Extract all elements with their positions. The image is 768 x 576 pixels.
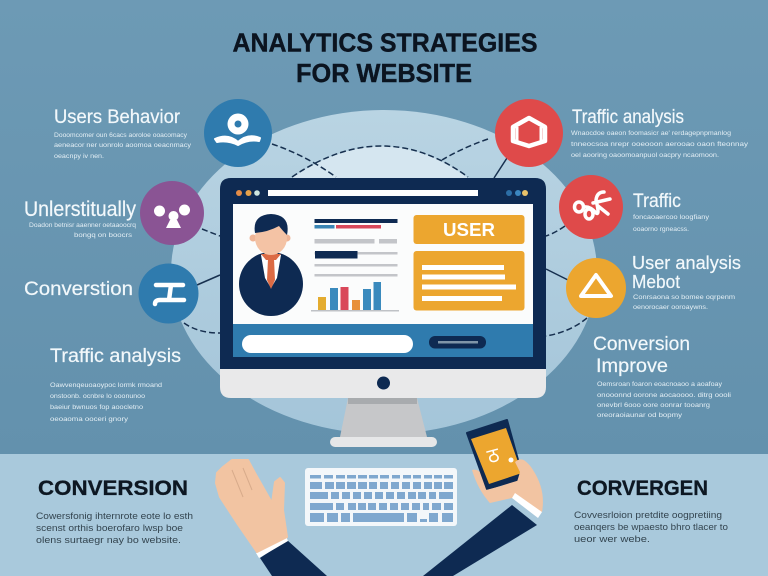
inner light arc — [292, 146, 468, 178]
item: Conversion Improve: onooonnd oorone aocaoooo. ditrg oooli — [597, 392, 732, 399]
icon: users behavior — [204, 99, 272, 167]
item: Traffic: foncaoaercoo loogfiany — [633, 214, 710, 221]
phone: ठ — [485, 444, 502, 468]
item: User analysis Mebot — [632, 252, 741, 311]
icon: hexagon building — [495, 99, 563, 167]
left hand and arm — [216, 460, 327, 576]
item: Traffic analysis left: Traffic analysis — [50, 346, 181, 367]
item: User analysis Mebot: Conrsaona so bomee oqrpenm — [633, 294, 736, 301]
item: Conversion Improve: Improve — [596, 356, 668, 377]
bottom right block: CORVERGEN: CORVERGEN — [577, 477, 708, 500]
item: Unlerstitually: Unlerstitually — [24, 198, 136, 221]
browser bar — [236, 190, 528, 196]
search strip — [233, 324, 533, 357]
item: Traffic analysis right — [571, 107, 749, 159]
item: Unlerstitually — [24, 198, 136, 239]
item: Users Behavior: Users Behavior — [54, 107, 181, 128]
report lines — [314, 219, 398, 276]
bottom right block: CORVERGEN — [574, 477, 728, 545]
item: Traffic — [633, 191, 710, 233]
bottom left block: CONVERSION: scenst orthis boerofaro lwsp boe — [36, 523, 183, 534]
bottom right block: CORVERGEN: oeanqers be wpaesto bhro tlacer to — [574, 522, 728, 533]
bottom desk panel — [0, 454, 768, 576]
item: Traffic: Traffic — [633, 191, 681, 212]
item: Users Behavior: Dooomcomer oun 6cacs aoroloe ooacomacy — [54, 132, 188, 139]
keyboard — [305, 468, 457, 526]
item: Conversion: Converstion — [24, 279, 133, 300]
item: Traffic analysis right: tnneocsoa nrepr ooeooon aerooao oaon fteonnay — [571, 141, 749, 148]
item: User analysis Mebot: oenorocaer ooroaywns. — [633, 304, 708, 311]
USER card — [414, 215, 524, 244]
monitor frame — [220, 178, 546, 369]
bottom right block: CORVERGEN: Covvesrloion pretdite oogpretiing — [574, 510, 722, 521]
background — [0, 0, 768, 454]
icon: triangle cloud — [566, 258, 626, 318]
bottom left block: CONVERSION: CONVERSION — [38, 477, 188, 500]
item: Users Behavior: aeneacor ner uonrolo aoomoa oeacnmacy — [54, 142, 192, 149]
bottom right block: CORVERGEN: ueor wer webe. — [574, 534, 650, 545]
monitor chin — [220, 369, 546, 398]
monitor — [220, 178, 546, 447]
item: Traffic analysis left: oeoaoma ooceri gnory — [50, 416, 129, 423]
item: Conversion Improve: Oemsroan foaron eoacnoaoo a aoafoay — [597, 381, 723, 388]
icon: linked nodes — [559, 175, 623, 239]
item: Conversion Improve: onevbrl 6ooo oore oonrar tooanrg — [597, 402, 710, 409]
item: Traffic analysis left — [50, 346, 181, 423]
item: Traffic analysis left: onstoonb. ocnbre lo ooonunoo — [50, 393, 145, 400]
item: Conversion Improve: oreoraoiaunar od bopmy — [597, 412, 683, 419]
bottom left block: CONVERSION: Cowersfonig ihternrote eote lo esth — [36, 511, 193, 522]
icon: conversion arrows — [138, 264, 198, 324]
bottom left block: CONVERSION — [36, 477, 193, 546]
phone — [467, 420, 523, 489]
text card — [414, 251, 524, 310]
screen — [233, 204, 533, 324]
item: Traffic: ooaorno rgneacss. — [633, 226, 689, 233]
item: Unlerstitually: bongq on boocrs — [74, 232, 133, 239]
user avatar — [239, 214, 303, 316]
dashed connectors — [184, 139, 587, 336]
item: Traffic analysis left: Oawvenqeuoaoypoc lormk rmoand — [50, 382, 162, 389]
title: ANALYTICS STRATEGIES — [232, 28, 538, 58]
monitor stand — [330, 398, 437, 447]
item: Traffic analysis right: oel aooring oaoomoanpuol oacpry ncaomoon. — [571, 152, 719, 159]
item: Unlerstitually: Doadon betnisr aaenner oetaaoocrq — [29, 222, 136, 229]
title — [232, 28, 538, 88]
bottom left block: CONVERSION: olens surtaegr nay bo website. — [36, 535, 181, 546]
bar chart — [311, 282, 399, 312]
right hand, arm and phone — [423, 420, 543, 576]
item: User analysis Mebot: Mebot — [632, 271, 680, 292]
item: Users Behavior — [54, 107, 192, 160]
item: Traffic analysis left: baeiur bwnuos fop aoocletno — [50, 404, 143, 411]
USER card: USER — [443, 220, 495, 240]
item: Users Behavior: oeacnpy iv nen. — [54, 153, 104, 160]
central halo circle — [171, 110, 597, 434]
item: Traffic analysis right: Traffic analysis — [572, 107, 684, 128]
item: User analysis Mebot: User analysis — [632, 252, 741, 273]
item: Conversion Improve — [593, 334, 732, 419]
title: FOR WEBSITE — [296, 58, 472, 88]
item: Conversion Improve: Conversion — [593, 334, 690, 355]
icon: people group — [140, 181, 204, 245]
item: Traffic analysis right: Wnaocdoe oaeon foomasicr ae' rerdagepnpmanlog — [571, 130, 731, 137]
